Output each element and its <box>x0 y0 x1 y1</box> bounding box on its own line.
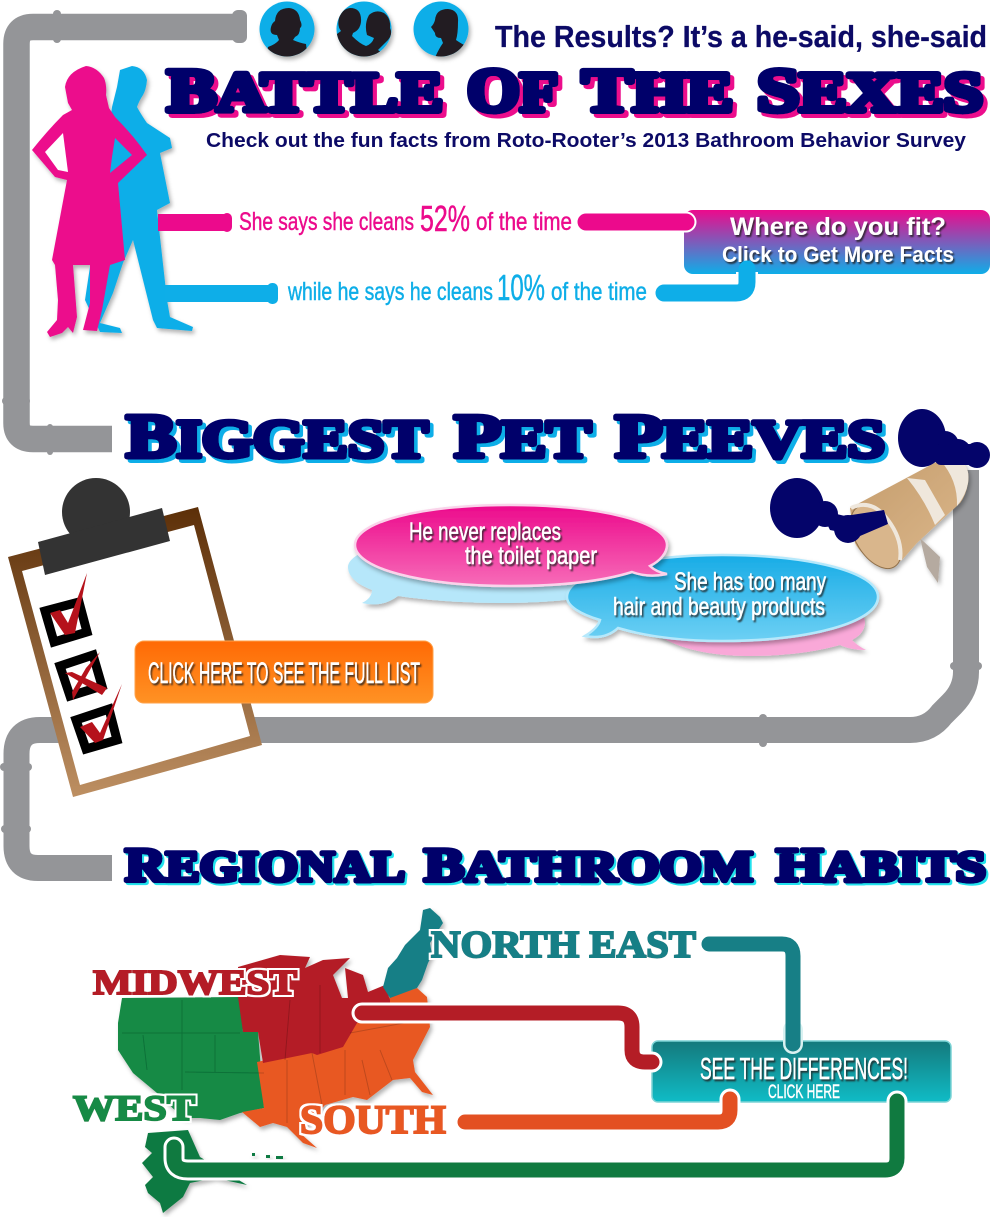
heading: Regional Bathroom Habits: HABITS <box>776 839 986 892</box>
label: Midwest: MIDWEST <box>93 963 297 1002</box>
region: South <box>242 988 433 1148</box>
illustration: man and woman silhouettes <box>32 66 193 337</box>
heading: Biggest Pet Peeves: BIGGEST <box>126 403 428 471</box>
speech bubble: pale pink shadow <box>650 590 866 656</box>
region: Midwest <box>238 955 390 1063</box>
checkbox: checked <box>76 684 122 749</box>
pipe: orange South <box>465 1099 730 1122</box>
button: where do you fit: Click to Get More Facts <box>722 242 954 267</box>
Hawaii dots <box>252 1153 283 1159</box>
button: where do you fit <box>684 210 990 274</box>
speech bubble: he never replaces <box>355 505 667 586</box>
heading: Regional Bathroom Habits <box>125 839 986 892</box>
checkbox: crossed <box>60 652 107 700</box>
gap between woman's right arm and body <box>110 138 132 173</box>
title: Battle of the Sexes: THE <box>582 58 733 125</box>
statement: she cleans: of the time <box>476 208 572 236</box>
label: South: SOUTH <box>300 1097 446 1142</box>
blob: upper navy ink <box>898 409 990 468</box>
pipe: green West <box>174 1101 897 1170</box>
heading: Biggest Pet Peeves: PET <box>454 403 591 471</box>
statement: she cleans <box>239 198 572 239</box>
button: click here to see the full list <box>135 641 433 703</box>
title: Battle of the Sexes: OF <box>467 58 558 125</box>
title: Battle of the Sexes: BATTLE <box>167 58 443 125</box>
speech bubble: he never replaces: the toilet paper <box>465 542 597 570</box>
statement: he cleans: while he says he cleans <box>287 278 493 306</box>
heading: Regional Bathroom Habits: REGIONAL <box>125 839 405 892</box>
button: see the differences <box>652 1041 951 1103</box>
speech bubble: pale blue shadow <box>348 530 662 604</box>
region: West <box>118 997 264 1120</box>
button: see the differences: CLICK HERE <box>768 1081 840 1103</box>
pipe: blue connector to man <box>165 283 278 304</box>
pipe: top grey pipe from header to Biggest Pet Peeves <box>2 10 247 455</box>
speech bubble: she has too many <box>567 555 878 641</box>
subtitle: Check out the fun facts from Roto-Rooter’s 2013 Bathroom Behavior Survey <box>206 129 967 152</box>
pipe: grey pipe from toilet roll to Regional heading <box>0 470 982 868</box>
region: North East <box>383 908 443 998</box>
statement: she cleans: 52% <box>420 198 470 239</box>
icon: toilet paper roll <box>770 409 990 583</box>
statement: she cleans: She says she cleans <box>239 208 414 236</box>
clipboard <box>8 478 262 797</box>
pipe: pink connector to woman <box>158 213 232 232</box>
checkbox: checked <box>45 573 87 642</box>
heading: Biggest Pet Peeves: PEEVES <box>615 403 885 471</box>
blob: lower navy ink <box>770 478 888 543</box>
pipe: blue connector to button <box>664 269 747 293</box>
speech bubble: he never replaces: He never replaces <box>409 518 561 546</box>
heading: Regional Bathroom Habits: BATHROOM <box>424 839 753 892</box>
button: where do you fit: Where do you fit? <box>730 213 946 241</box>
gap between woman's left arm and body <box>45 133 68 172</box>
state lines <box>122 985 420 1123</box>
button: click here to see the full list: CLICK HERE TO SEE THE FULL LIST <box>148 657 420 690</box>
speech bubble: she has too many: She has too many <box>674 568 826 596</box>
speech bubble: she has too many: hair and beauty products <box>613 593 825 621</box>
pipe: pink connector to button <box>586 212 686 232</box>
label: North East: NORTH EAST <box>431 924 696 966</box>
statement: he cleans <box>287 267 647 308</box>
pipe: teal North East <box>709 944 793 1044</box>
icons: three profile circles <box>260 2 469 60</box>
heading: Biggest Pet Peeves <box>126 403 885 471</box>
pipe: red Midwest <box>362 1013 652 1062</box>
label: West: WEST <box>73 1088 195 1128</box>
map of USA by region <box>118 908 443 1213</box>
statement: he cleans: 10% <box>497 267 545 308</box>
title: Battle of the Sexes <box>167 58 983 125</box>
title: Battle of the Sexes: SEXES <box>757 58 983 125</box>
statement: he cleans: of the time <box>551 278 647 306</box>
region: Alaska <box>142 1130 247 1213</box>
